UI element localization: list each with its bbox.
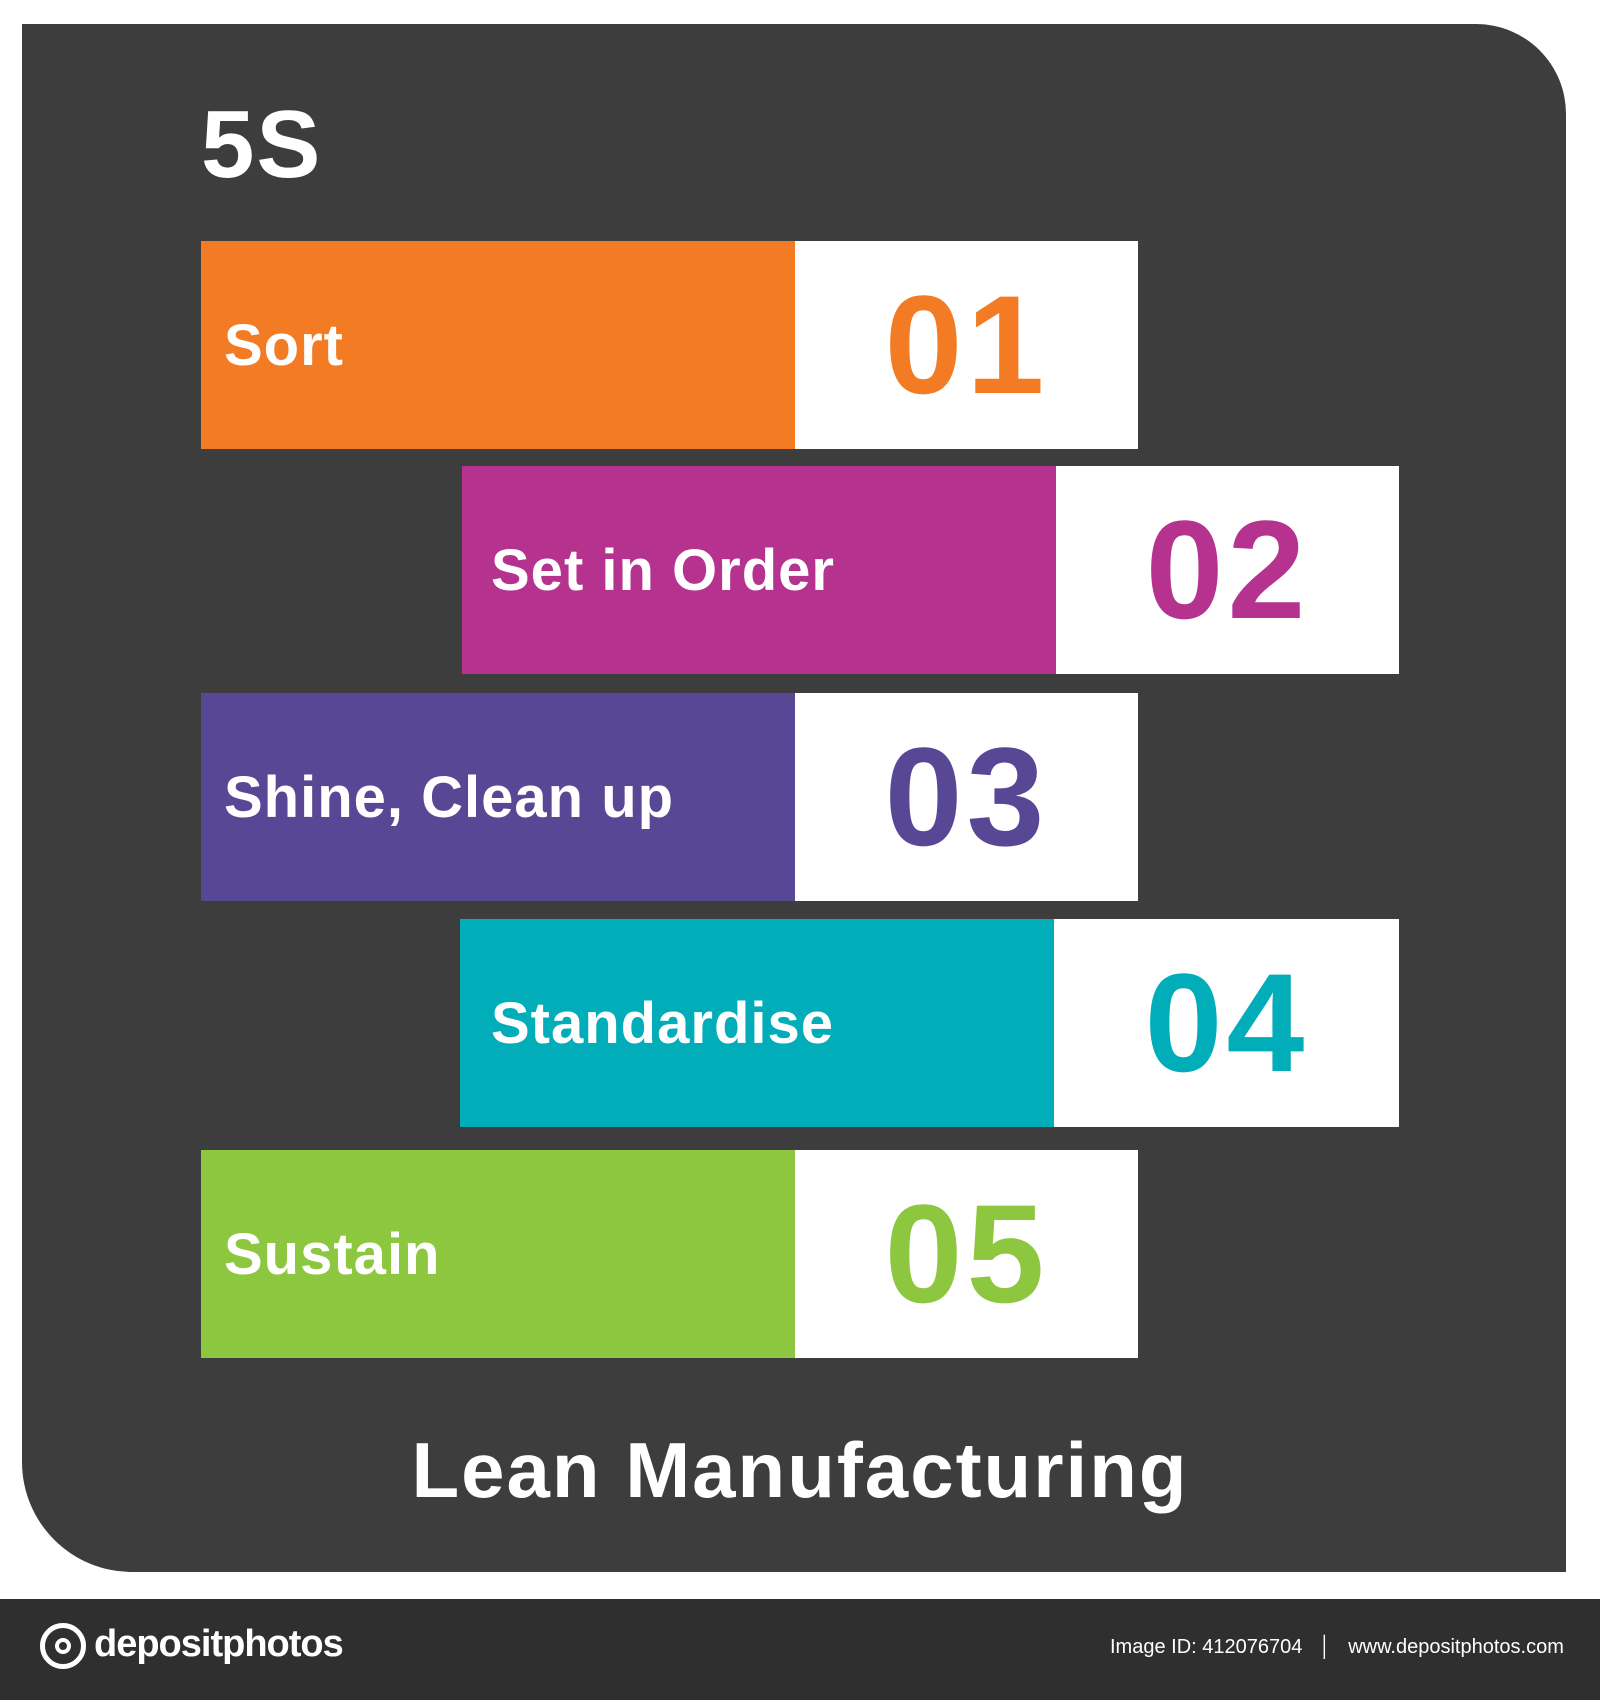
- label: Sort: [201, 241, 795, 449]
- footer info text: Image ID: 412076704 │ www.depositphotos.com: [1110, 1636, 1564, 1658]
- icon: camera logo: [40, 1623, 86, 1669]
- bar 4: Standardise: [460, 919, 1399, 1127]
- number 04: 04: [1145, 944, 1308, 1101]
- footer logo text: depositphotos: [94, 1623, 343, 1665]
- number 03: 03: [885, 718, 1048, 875]
- bar 5: Sustain: [201, 1150, 1138, 1358]
- label: Shine, Clean up: Shine, Clean up: [224, 764, 674, 830]
- number 05: 05: [885, 1175, 1048, 1332]
- bar 1: Sort: [201, 241, 1138, 449]
- label: Sustain: [201, 1150, 795, 1358]
- label: Sustain: Sustain: [224, 1222, 440, 1286]
- bar 2: Set in Order: [462, 466, 1399, 674]
- number 02: [1056, 466, 1399, 674]
- number 01: [795, 241, 1138, 449]
- label: Standardise: [460, 919, 1054, 1127]
- number 01: 01: [885, 266, 1048, 423]
- label: Standardise: Standardise: [491, 990, 834, 1056]
- footer bar: [0, 1599, 1600, 1700]
- label: Shine, Clean up: [201, 693, 795, 901]
- number 02: 02: [1146, 491, 1309, 648]
- bar 3: Shine: [201, 693, 1138, 901]
- label: Set in Order: [462, 466, 1056, 674]
- title: 5S: 5S: [201, 91, 322, 198]
- subtitle: Lean Manufacturing: Lean Manufacturing: [411, 1426, 1189, 1514]
- number 03: [795, 693, 1138, 901]
- label: Sort: Sort: [224, 312, 344, 378]
- label: Set in Order: Set in Order: [491, 538, 835, 602]
- number 04: [1054, 919, 1399, 1127]
- number 05: [795, 1150, 1138, 1358]
